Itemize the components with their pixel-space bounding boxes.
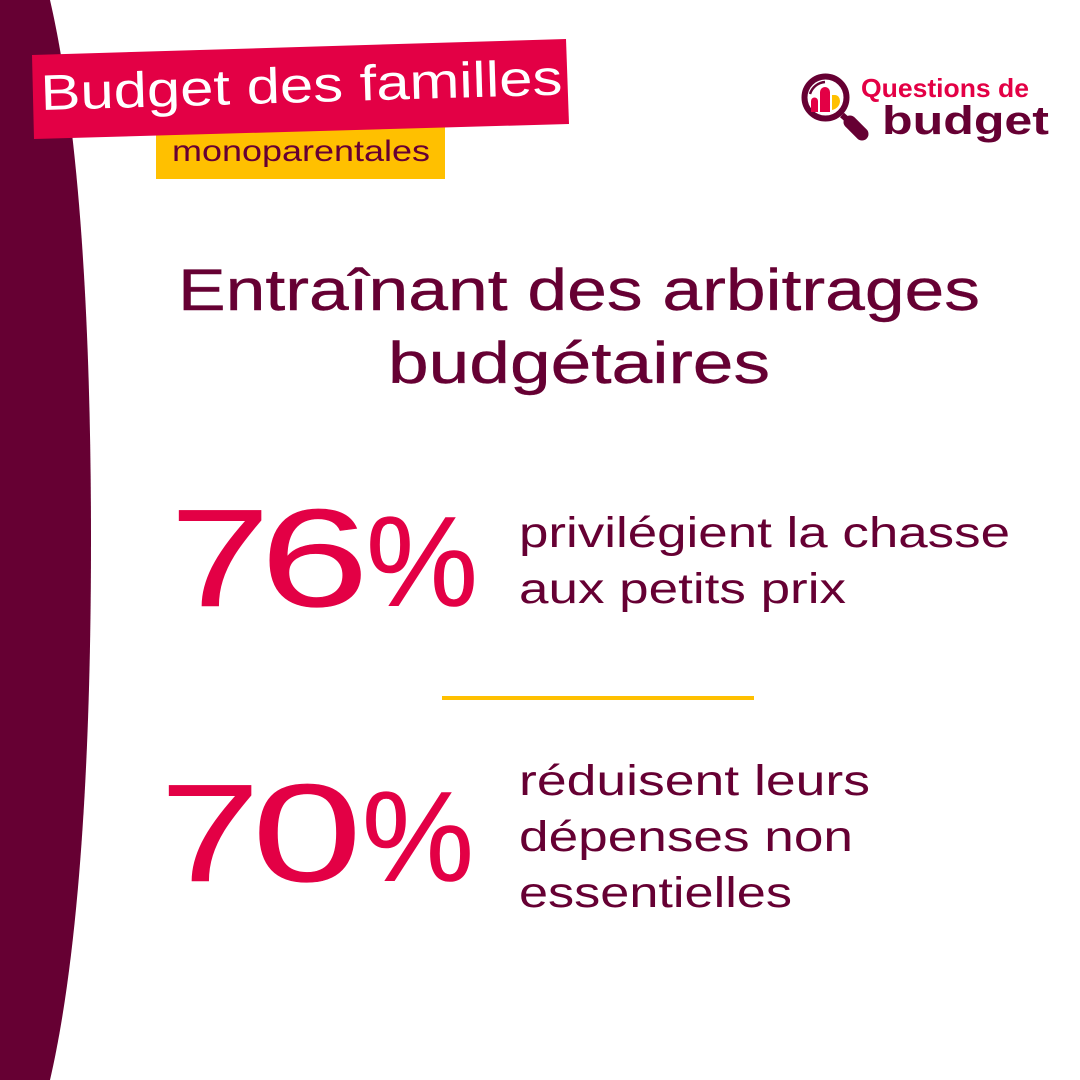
stat: 70% (160, 756, 474, 911)
tag: monoparentales: monoparentales (172, 135, 430, 168)
stat text: chasse aux petits prix: aux petits prix (519, 565, 847, 613)
stat text: dépenses non essentielles: dépenses non (519, 813, 853, 861)
stat text: chasse aux petits prix (519, 509, 1010, 613)
stat: 76%: % (366, 491, 478, 634)
stat: 70%: 0 (252, 756, 362, 911)
stat: 70%: % (362, 766, 474, 909)
stat text: chasse aux petits prix: privilégient la chasse (519, 509, 1010, 557)
stat text: dépenses non essentielles (519, 757, 870, 917)
logo: Questions de budget (804, 73, 1049, 143)
curved side panel (0, 0, 91, 1080)
logo: Questions de budget: Questions de (861, 73, 1029, 103)
heading: budgétaires (388, 331, 770, 396)
title banner (32, 39, 569, 139)
stat: 76%: 6 (260, 481, 369, 636)
tag: monoparentales (156, 125, 445, 179)
stat text: dépenses non essentielles: réduisent leurs (519, 757, 870, 805)
stat: 70%: 7 (160, 756, 260, 911)
heading (178, 258, 980, 396)
stat: 76% (170, 481, 478, 636)
logo: Questions de budget: budget (882, 99, 1049, 143)
heading: Entraînant des arbitrages (178, 258, 980, 323)
icon: magnifying glass with bars (804, 76, 862, 134)
stat: 76%: 7 (170, 481, 270, 636)
stat text: dépenses non essentielles: essentielles (519, 869, 792, 917)
title banner: Budget des familles (40, 50, 563, 121)
